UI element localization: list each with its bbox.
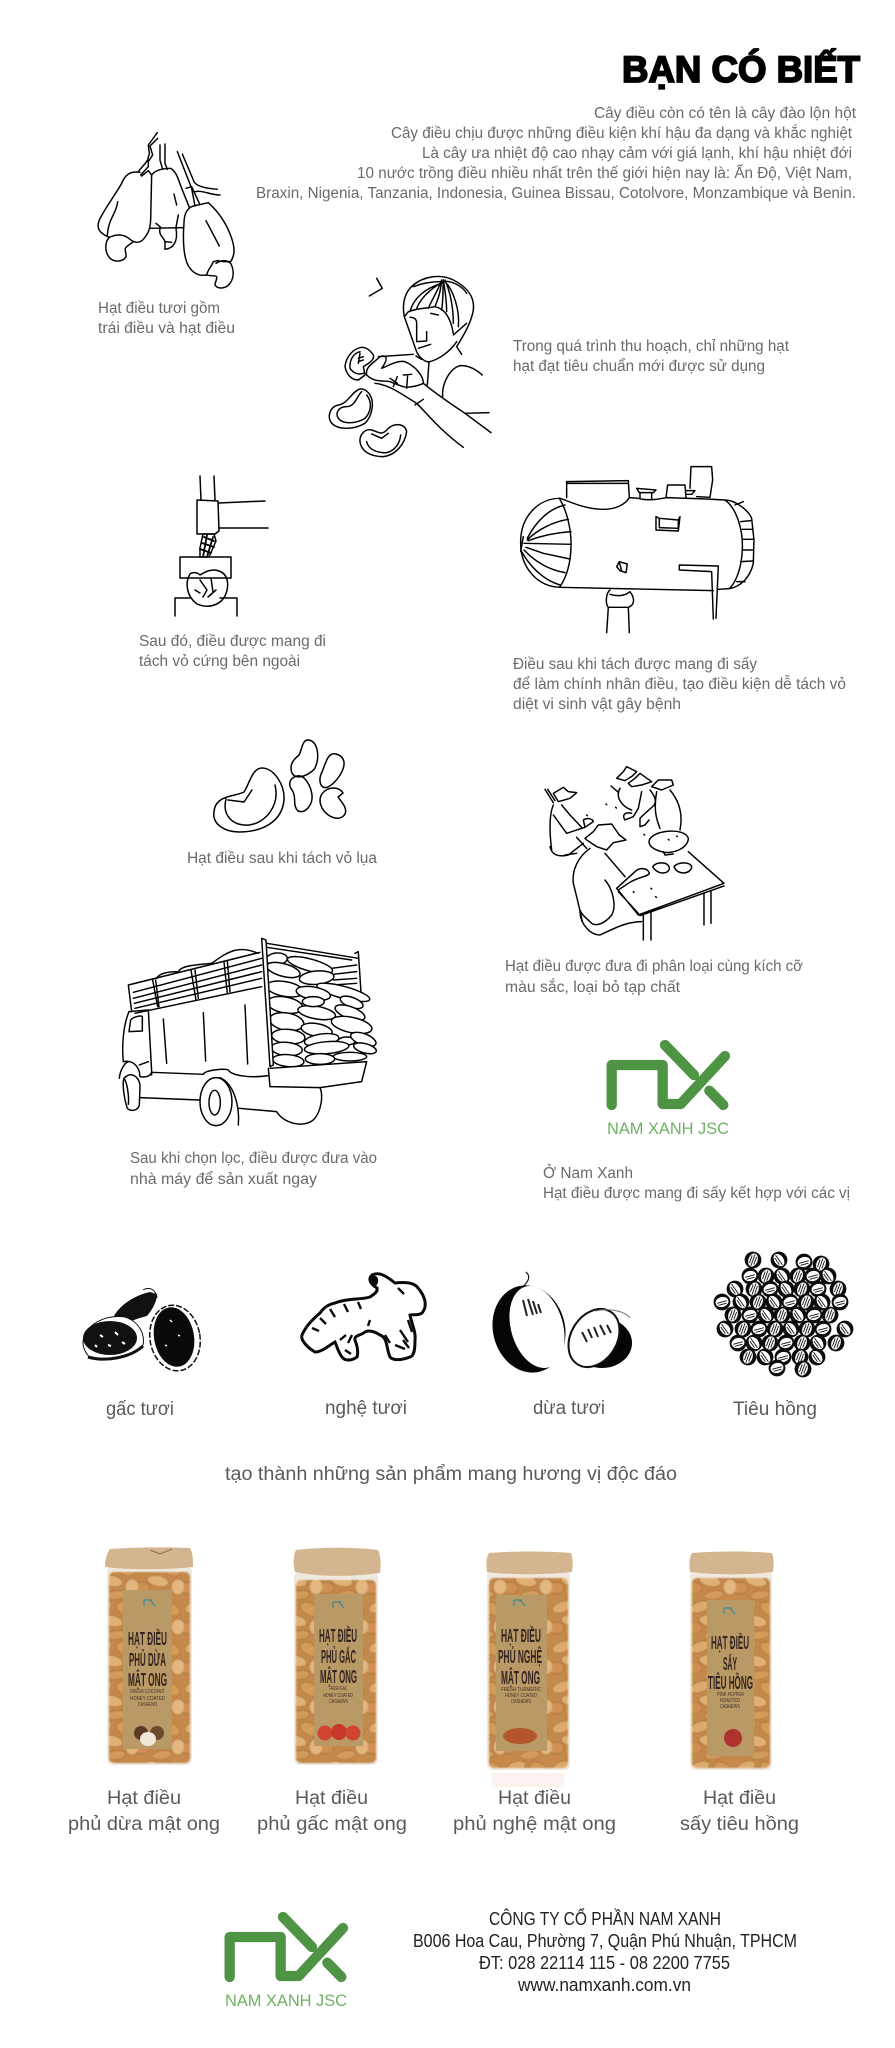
product jar: pink pepper: ROASTED xyxy=(720,1698,740,1704)
caption: fresh cashew: trái điều và hạt điều xyxy=(98,320,235,337)
footer logo wordmark: NAM XANH JSC xyxy=(225,1991,347,2010)
product jar: turmeric xyxy=(486,1552,573,1787)
caption: at Nam Xanh xyxy=(543,1164,850,1202)
caption: at Nam Xanh: Hạt điều được mang đi sấy kết hợp với các vị xyxy=(543,1185,850,1202)
caption: at Nam Xanh: Ở Nam Xanh xyxy=(543,1164,633,1182)
icon: gac fruit xyxy=(83,1288,205,1375)
product jar: coconut xyxy=(105,1547,193,1765)
intro text block: Cây điều chịu được những điều kiện khí hậu đa dạng và khắc nghiệt xyxy=(391,125,853,142)
footer contact text: B006 Hoa Cau, Phường 7, Quận Phú Nhuận, TPHCM xyxy=(413,1931,797,1951)
icon: person harvesting xyxy=(329,276,491,457)
footer contact text: CÔNG TY CỔ PHẦN NAM XANH xyxy=(489,1908,721,1929)
footer contact text xyxy=(413,1908,797,1995)
footer logo xyxy=(225,1917,347,2010)
caption: shell removal xyxy=(139,633,326,670)
title: BẠN CÓ BIẾT xyxy=(622,48,860,90)
intro text block: 10 nước trồng điều nhiều nhất trên thế giới hiện nay là: Ấn Độ, Việt Nam, xyxy=(357,165,852,182)
product jar: gac: MẬT ONG xyxy=(320,1666,357,1687)
caption: sorting xyxy=(505,958,803,996)
product names: Hạt điều xyxy=(295,1788,368,1809)
product jar: coconut: PHỦ DỪA xyxy=(129,1649,166,1670)
product names: phủ dừa mật ong xyxy=(68,1814,220,1835)
product names xyxy=(68,1788,799,1835)
product jar: turmeric: FRESH TURMERIC xyxy=(501,1687,541,1693)
logo mark xyxy=(612,1045,725,1105)
product jar: gac: PHỦ GẤC xyxy=(321,1646,356,1667)
product jar: gac: CASHEWS xyxy=(329,1699,348,1705)
caption: shell removal: tách vỏ cứng bên ngoài xyxy=(139,653,300,670)
footer contact text: www.namxanh.com.vn xyxy=(517,1975,691,1995)
product jar: gac: HẠT ĐIỀU xyxy=(319,1625,357,1646)
caption: truck: Sau khi chọn lọc, điều được đưa vào xyxy=(130,1150,377,1167)
icon: cashew fruits xyxy=(98,133,234,288)
product jar: coconut: MẬT ONG xyxy=(128,1669,167,1690)
icon: shell press xyxy=(175,476,268,616)
icon: coconut xyxy=(483,1272,632,1380)
product jar: pink pepper: CASHEWS xyxy=(720,1704,740,1710)
icon: turmeric root xyxy=(302,1274,425,1360)
product jar: turmeric: HONEY COATED xyxy=(505,1693,537,1699)
heading: unique flavor products: tạo thành những sản phẩm mang hương vị độc đáo xyxy=(225,1464,677,1485)
caption: drying: Điều sau khi tách được mang đi sấy xyxy=(513,656,757,673)
product names: phủ nghệ mật ong xyxy=(453,1814,616,1835)
product names: sấy tiêu hồng xyxy=(680,1814,799,1835)
caption: sorting: màu sắc, loại bỏ tạp chất xyxy=(505,979,681,996)
icon: pink peppercorns xyxy=(714,1252,853,1377)
icon: workers sorting xyxy=(545,767,724,940)
product names: Hạt điều xyxy=(703,1788,776,1809)
intro text block xyxy=(256,105,857,202)
product jar: pink pepper xyxy=(689,1552,774,1770)
caption: truck xyxy=(130,1150,377,1188)
product jar: turmeric: HẠT ĐIỀU xyxy=(501,1625,541,1646)
product jar: gac: HONEY COATED xyxy=(323,1693,353,1699)
flavor labels: dừa tươi xyxy=(533,1398,605,1419)
product jar: pink pepper: SẤY xyxy=(723,1653,737,1674)
caption: fresh cashew xyxy=(98,300,235,337)
product jar: coconut: HẠT ĐIỀU xyxy=(128,1628,167,1649)
product jar: turmeric: MẬT ONG xyxy=(501,1667,540,1688)
intro text block: Braxin, Nigenia, Tanzania, Indonesia, Guinea Bissau, Cotolvore, Monzambique và Benin. xyxy=(256,185,856,202)
caption: harvesting: Trong quá trình thu hoạch, chỉ những hạt xyxy=(513,338,790,355)
caption: drying xyxy=(513,656,846,713)
product jar: coconut: HONEY COATED xyxy=(130,1696,165,1702)
product jar: turmeric: PHỦ NGHỆ xyxy=(498,1646,542,1667)
product names: phủ gấc mật ong xyxy=(257,1814,407,1835)
flavor labels: Tiêu hồng xyxy=(733,1399,817,1420)
intro text block: Là cây ưa nhiệt độ cao nhạy cảm với giá lạnh, khí hậu nhiệt đới xyxy=(422,145,852,162)
caption: kernels: Hạt điều sau khi tách vỏ lụa xyxy=(187,850,377,867)
caption: shell removal: Sau đó, điều được mang đi xyxy=(139,633,326,650)
product jar: gac xyxy=(294,1548,381,1765)
flavor labels: gấc tươi xyxy=(106,1399,174,1420)
caption: harvesting: hạt đạt tiêu chuẩn mới được sử dụng xyxy=(513,358,765,375)
caption: harvesting xyxy=(513,338,790,375)
footer logo mark xyxy=(230,1917,343,1977)
logo: Nam Xanh xyxy=(607,1045,729,1138)
icon: loaded truck xyxy=(119,938,378,1126)
logo wordmark: NAM XANH JSC xyxy=(607,1119,729,1138)
product jar: gac: FRESH GAC xyxy=(329,1686,347,1692)
intro text block: Cây điều còn có tên là cây đào lộn hột xyxy=(594,105,857,122)
icon: drying machine xyxy=(521,467,754,633)
flavor labels: nghệ tươi xyxy=(325,1398,407,1419)
caption: fresh cashew: Hạt điều tươi gồm xyxy=(98,300,220,317)
footer contact text: ĐT: 028 22114 115 - 08 2200 7755 xyxy=(479,1953,730,1973)
product jar: coconut: FRESH COCONUT xyxy=(130,1689,165,1695)
caption: sorting: Hạt điều được đưa đi phân loại cùng kích cỡ xyxy=(505,958,803,975)
icon: kernels xyxy=(214,740,346,832)
product names: Hạt điều xyxy=(498,1788,571,1809)
caption: truck: nhà máy để sản xuất ngay xyxy=(130,1171,317,1188)
flavor labels xyxy=(106,1398,817,1420)
product jar: pink pepper: TIÊU HỒNG xyxy=(708,1672,753,1693)
product jar: pink pepper: PINK PEPPER xyxy=(717,1692,744,1698)
product jar: turmeric: CASHEWS xyxy=(511,1699,531,1705)
product names: Hạt điều xyxy=(107,1788,181,1809)
product jar: pink pepper: HẠT ĐIỀU xyxy=(711,1632,749,1653)
caption: drying: diệt vi sinh vật gây bệnh xyxy=(513,696,681,713)
product jar: coconut: CASHEWS xyxy=(138,1702,157,1708)
caption: drying: để làm chính nhân điều, tạo điều kiện dễ tách vỏ xyxy=(513,676,846,693)
